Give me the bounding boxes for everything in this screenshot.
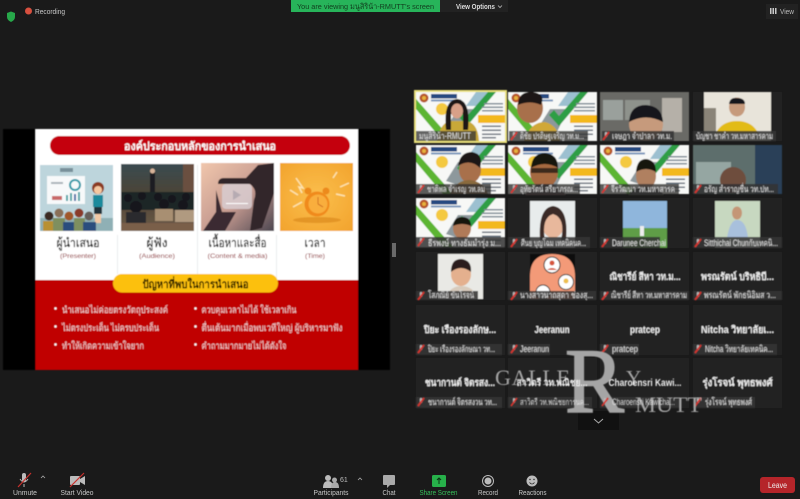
tile: participant 13: โสภณิย์ ขันโรจน์	[428, 289, 474, 300]
tile: pratcep: pratcep	[630, 325, 660, 336]
image: audience photo	[121, 164, 194, 231]
tile: participant 3	[600, 92, 689, 141]
list: problems right column	[194, 304, 342, 352]
tile: active speaker: มนูสิริน้า-RMUTT	[419, 131, 471, 142]
tile: Darunee Cherchai: Darunee Cherchai	[612, 238, 666, 248]
tile: Nitcha: Nitcha วิทยาลัยเทคนิค...	[705, 344, 773, 354]
label: presenter: ผู้นำเสนอ	[56, 236, 100, 251]
label: audience: (Audience)	[139, 253, 175, 260]
tile: participant 21: ชนากานต์ จิตรสงวน วท...	[428, 396, 497, 407]
control: start video	[60, 473, 94, 497]
banner: viewing screen: You are viewing มนูสิริน้า-RMUTT's screen	[297, 2, 434, 11]
tile: participant 7: จีรวัฒนา วท.มหาสารค	[611, 184, 675, 194]
watermark: Gallery RMUTT: GALLE	[495, 365, 570, 390]
tile: Sitthichai	[693, 198, 782, 248]
tile: participant 10	[508, 198, 597, 249]
tile: participant 15	[600, 252, 689, 300]
label: content and media: เนื้อหาและสื่อ	[208, 233, 266, 250]
names shown over the watermark: สาวิตรี วท.พณิชยการนค...	[520, 397, 589, 407]
list: problems left column: นำเสนอไม่ค่อยตรงวัตถุประสงค์	[62, 304, 168, 316]
panel: shared presentation slide	[3, 129, 390, 370]
label: time: (Time)	[305, 253, 325, 260]
watermark: Gallery RMUTT: R	[565, 330, 625, 432]
list: problems right column: คำถามมากมายไม่ได้ดังใจ	[202, 340, 286, 352]
tile: participant 24: รุ่งโรจน์ พุทธพงศ์	[705, 396, 752, 408]
image: content and media photo	[201, 163, 274, 231]
watermark: Gallery RMUTT: Y	[626, 366, 641, 390]
names shown over the watermark: Charoensri Kawicha...	[612, 397, 675, 407]
label: time	[304, 236, 326, 260]
tile: participant 8	[693, 145, 782, 194]
tile: participant 4	[693, 92, 782, 141]
tile: pratcep: pratcep	[612, 344, 638, 354]
watermark: Gallery RMUTT: MUTT	[635, 392, 703, 417]
tile: participant 24	[693, 358, 782, 408]
tile: participant 16: พรณรัตน์ พักธนิอิมส ว...	[704, 289, 776, 300]
heading: problems pill	[113, 274, 278, 292]
control: chat: Chat	[382, 490, 396, 497]
tile: participant 5: ชาติพล จำเรญ วท.ลม	[427, 184, 485, 194]
image: presenter illustration	[40, 165, 113, 231]
control: record	[478, 476, 498, 497]
decorative column dividers	[118, 165, 276, 280]
control: record: Record	[478, 490, 498, 497]
button: view options	[440, 0, 508, 12]
heading: slide title	[50, 136, 350, 155]
tile: participant 17: ปิยะ เรืองรองลักษณา วท...	[428, 344, 495, 354]
tile: participant 22	[508, 358, 597, 408]
tile: participant 9	[416, 198, 505, 249]
image: alarm clock	[280, 163, 353, 231]
top bar: security and recording status	[7, 7, 65, 22]
list: problems right column: ตื่นเต้นมากเมื่อพบเวทีใหญ่ ผู้บริหารมาฟัง	[202, 321, 342, 334]
names shown over the watermark: สาวิตรี วท.พณิชย...	[516, 377, 588, 389]
control: reactions	[518, 476, 547, 497]
control: chat	[382, 475, 396, 497]
list: problems left column: ทำให้เกิดความเข้าใจยาก	[62, 340, 144, 352]
tile: participant 24: รุ่งโรจน์ พุทธพงศ์	[702, 376, 773, 389]
tile: pratcep	[600, 305, 689, 355]
tile: Jeeranun	[508, 305, 597, 355]
tile: active speaker	[414, 90, 507, 143]
label: time: เวลา	[304, 236, 326, 250]
names shown over the watermark: Charoensri Kawi...	[608, 378, 682, 389]
button: leave	[760, 477, 795, 493]
tile: participant 13	[416, 252, 505, 300]
heading: slide title: องค์ประกอบหลักของการนำเสนอ	[124, 139, 276, 153]
label: presenter: (Presenter)	[60, 253, 96, 260]
tile: participant 7	[600, 145, 689, 195]
label: content and media: (Content & media)	[208, 253, 268, 260]
tile: participant 9: ธีรพงษ์ ทางธัมมำรุ่ง ม...	[428, 237, 501, 249]
button: view	[766, 4, 798, 19]
panel: participant gallery	[414, 90, 782, 408]
tile: participant 21: ชนากานต์ จิตรสง...	[425, 377, 495, 389]
tile: participant 10: ศีนย บุญโฉม เทคนิคนค...	[521, 238, 586, 249]
tile: Charoensri	[600, 358, 689, 408]
watermark: Gallery RMUTT	[495, 330, 703, 432]
control: participants: 61	[340, 477, 348, 484]
tile: Jeeranun: Jeeranun	[534, 325, 570, 336]
control: share screen	[420, 475, 458, 497]
tile: participant 3: เจษฎา จำปาลา วท.ม.	[612, 131, 672, 141]
tile: Jeeranun: Jeeranun	[520, 344, 549, 354]
button: scroll gallery down	[578, 411, 619, 430]
control: participants	[314, 475, 362, 497]
tile: participant 17	[416, 305, 505, 355]
button: view options: View Options	[456, 4, 495, 11]
label: presenter	[56, 236, 100, 260]
tile: participant 15: ณิชารีย์ สีหา วท.มหาสารคาม	[611, 289, 687, 300]
tile: participant 2: ดิชัย ปรดิษฐเจริญ วท.ม...	[520, 131, 584, 142]
tile: participant 2	[508, 92, 597, 142]
button: view: View	[780, 7, 795, 16]
tile: participant 14 with icon avatar: นางสาวนาถสุดา ช่องสุ...	[520, 290, 593, 301]
control: participants: Participants	[314, 490, 349, 497]
list: problems right column: ควบคุมเวลาไม่ได้ ใช้เวลาเกิน	[202, 304, 297, 316]
tile: Darunee Cherchai	[600, 198, 689, 248]
names shown over the watermark	[511, 377, 682, 407]
control: start video: Start Video	[60, 490, 94, 497]
toolbar: bottom meeting controls	[13, 473, 795, 497]
control: share screen: Share Screen	[420, 490, 458, 497]
control: reactions: Reactions	[518, 490, 547, 497]
tile: participant 8: อรัญ สำราญชื่น วท.ปท...	[704, 182, 774, 194]
tile: Nitcha	[693, 305, 782, 355]
tile: participant 16: พรณรัตน์ บริหธิบี...	[701, 271, 774, 283]
tile: Nitcha: Nitcha วิทยาลัยเ...	[701, 324, 774, 336]
label: audience	[139, 236, 175, 260]
tile: participant 16	[693, 252, 782, 300]
splitter handle	[392, 243, 396, 257]
panel: problems	[36, 274, 358, 370]
list: problems left column	[54, 304, 168, 352]
control: unmute: Unmute	[13, 490, 37, 497]
tile: participant 17: ปิยะ เรืองรองลักษ...	[423, 324, 496, 336]
tile: participant 6: อุทัยรัตน์ สรียาภรณ...	[520, 183, 578, 195]
button: leave: Leave	[768, 481, 787, 490]
tile: participant 5	[416, 145, 505, 194]
top bar: security and recording status: Recording	[35, 7, 65, 16]
control: unmute	[13, 473, 45, 497]
tile: participant 21	[416, 358, 505, 408]
tile: participant 6	[508, 145, 597, 195]
label: audience: ผู้ฟัง	[146, 236, 168, 251]
heading: problems pill: ปัญหาที่พบในการนำเสนอ	[142, 276, 248, 291]
tile: participant 15: ณิชารีย์ สีหา วท.ม...	[610, 271, 681, 283]
list: problems left column: ไม่ตรงประเด็น ไม่ครบประเด็น	[61, 321, 159, 334]
tile: participant 14 with icon avatar	[508, 252, 597, 301]
label: content and media	[208, 233, 268, 260]
